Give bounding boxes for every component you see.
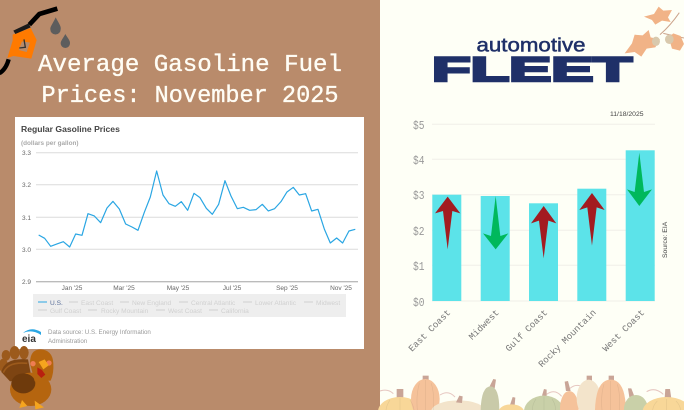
chart legend: West Coast [168,308,202,315]
direction arrows [435,153,652,258]
line chart: Mar '25 [113,285,135,292]
data source note [48,329,151,345]
chart legend: U.S. [50,300,63,307]
chart legend [33,294,346,317]
panel: right background [380,0,684,410]
icon: turkey [0,346,53,409]
title [38,52,342,110]
chart legend: Central Atlantic [191,300,236,307]
line chart: Jul '25 [223,285,242,292]
x axis labels: East Coast [406,307,453,354]
line chart: Jan '25 [62,285,83,292]
data source note: Data source: U.S. Energy Information [48,329,151,336]
panel: regular gasoline price chart [15,117,364,349]
chart legend: Midwest [316,300,340,307]
y axis labels: $1 [413,260,424,274]
line chart: May '25 [167,285,190,292]
x axis labels [406,307,647,370]
line chart: 3.1 [22,215,31,222]
x axis labels: Gulf Coast [503,307,550,354]
y axis labels: $5 [413,119,424,133]
date stamp: 11/18/2025 [610,111,644,118]
chart unit label: (dollars per gallon) [21,140,79,147]
chart legend: Rocky Mountain [101,308,149,315]
line chart: Nov '25 [330,285,352,292]
chart legend: New England [132,300,172,307]
eia logo [22,329,41,345]
icon: autumn leaves [625,7,684,57]
illustration: pumpkins [378,376,684,410]
logo: automotive fleet [432,34,632,89]
y axis labels: $0 [413,296,424,310]
bar chart: regional prices [406,119,655,370]
bars [432,150,655,301]
icon: fuel nozzle with drops [0,9,70,73]
logo: automotive fleet: FLEET [432,51,632,89]
chart legend: Lower Atlantic [255,300,297,307]
source note: Source: EIA [662,221,669,258]
y axis labels: $3 [413,189,424,203]
logo: automotive fleet: automotive [476,34,586,56]
y axis labels [413,119,424,310]
eia logo: eia [22,334,36,345]
x axis labels: Midwest [467,307,502,342]
chart heading: Regular Gasoline Prices [21,124,120,134]
line chart: 3.2 [22,182,31,189]
line chart: 3.3 [22,150,31,157]
title: Prices: November 2025 [42,83,338,110]
line chart: 3.0 [22,247,31,254]
x axis labels: West Coast [600,307,647,354]
chart legend: Gulf Coast [50,308,81,315]
line chart [22,150,358,292]
line chart: 2.9 [22,279,31,286]
chart legend: East Coast [81,300,113,307]
y axis labels: $4 [413,154,424,168]
panel: left background [0,0,380,410]
x axis labels: Rocky Mountain [536,307,599,370]
line chart: Sep '25 [276,285,298,292]
y axis labels: $2 [413,225,424,239]
data source note: Administration [48,338,88,345]
title: Average Gasoline Fuel [38,52,342,79]
chart legend: California [221,308,249,315]
